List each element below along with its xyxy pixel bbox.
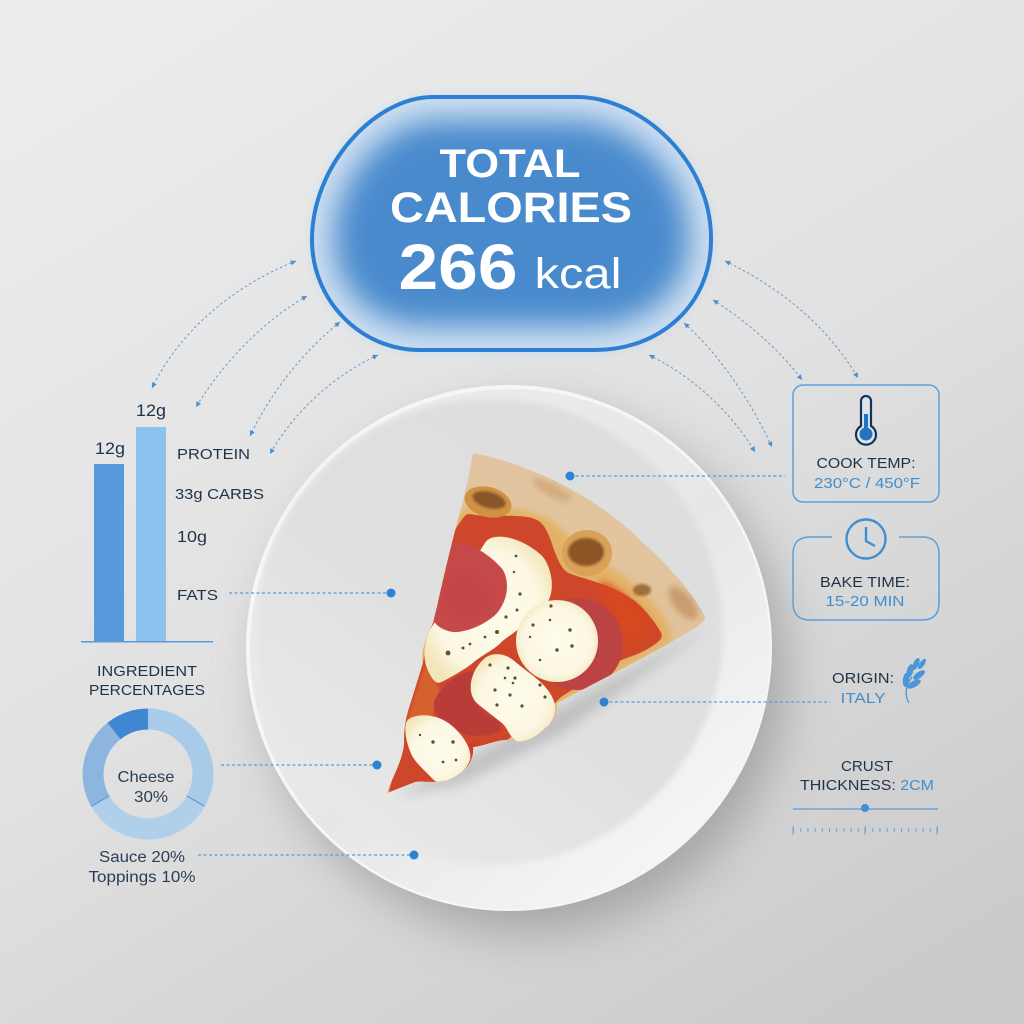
toasted spots [464,486,512,518]
calories badge [312,97,711,350]
icon: clock [846,520,886,558]
crust thickness: THICKNESS: 2CM [800,778,934,794]
bake time card [793,520,939,620]
bake time card: BAKE TIME: [820,575,910,591]
pizza slice [380,445,715,800]
donut label: 30% [134,789,168,806]
crust [380,445,715,800]
heading: total calories: TOTAL [440,142,580,186]
icon: thermometer [856,396,876,445]
donut label [118,769,175,806]
pepperoni 2 [550,598,623,690]
heading: total calories: CALORIES [390,184,632,232]
sauce and toppings labels: Sauce 20% [99,849,185,866]
donut chart [92,719,204,829]
bar chart: macros: 12g [95,439,125,458]
heading: total calories [390,142,632,303]
bar chart: macros: FATS [177,588,218,604]
cheese 2 [516,600,598,682]
bar chart: macros [81,401,264,642]
pepperoni 1 [433,542,507,632]
cook temp card: 230°C / 450°F [814,476,920,492]
ingredient percentages: PERCENTAGES [89,682,205,699]
ingredient percentages: INGREDIENT [97,663,197,680]
herb specks [419,555,574,763]
origin: ORIGIN: [832,671,894,687]
cook temp card: COOK TEMP: [816,456,916,472]
curved arrows to badge [152,261,858,454]
origin: ITALY [840,691,886,707]
cheese 3 [471,654,555,743]
cheese 4 [406,716,470,783]
bar chart: macros: 12g [136,401,166,420]
sauce and toppings labels [88,849,196,886]
cook temp card [793,385,939,502]
leader lines and dots [198,476,830,855]
heading: total calories: kcal [534,250,622,298]
ingredient percentages [89,663,205,699]
heading: total calories: 266 [398,231,518,303]
cheese 1 [425,537,552,684]
sauce [388,513,663,796]
crust thickness [793,759,938,835]
origin [832,657,927,707]
sauce and toppings labels: Toppings 10% [88,869,196,886]
crust thickness: CRUST [841,759,893,775]
thickness slider and ruler [793,804,938,835]
pepperoni 3 [434,670,502,736]
donut label: Cheese [118,769,175,786]
bar chart: macros: 10g [177,529,207,546]
bake time card: 15-20 MIN [826,594,904,610]
bar chart: macros: PROTEIN [177,447,250,463]
bar chart: macros: 33g CARBS [175,486,264,503]
plate [246,385,787,932]
icon: wheat [902,657,927,703]
